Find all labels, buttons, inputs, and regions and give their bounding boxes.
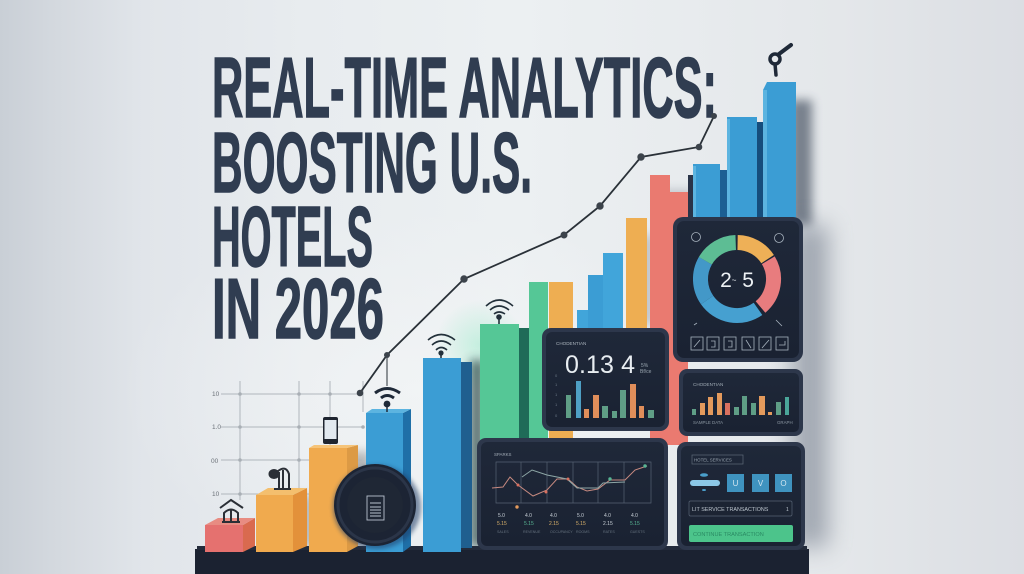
chart stat columns: OCCUPANCY xyxy=(550,530,573,534)
round speaker device xyxy=(333,464,421,549)
chart stat columns: ROOMS xyxy=(576,530,590,534)
control buttons: V xyxy=(758,479,764,488)
panel heading: CHODENTIAN xyxy=(556,341,586,346)
chart stat columns: 4.0 xyxy=(525,513,532,519)
chart stat columns: 5.15 xyxy=(497,521,507,527)
icon: bell hop cart xyxy=(270,469,291,489)
chart stat columns: 4.0 xyxy=(550,513,557,519)
panel: metric with bars xyxy=(542,328,669,431)
chart stat columns: REVENUE xyxy=(523,530,541,534)
icon: house xyxy=(220,500,243,522)
shelf xyxy=(195,546,809,574)
chart stat columns: 4.0 xyxy=(631,513,638,519)
bar: stepped red xyxy=(650,175,688,445)
icon: key on top of tallest bar xyxy=(770,45,791,75)
bars: stepped blue xyxy=(577,253,623,330)
panel heading: CHODENTIAN xyxy=(693,382,723,387)
icon: document xyxy=(367,496,384,520)
chart stat columns: RATES xyxy=(603,530,615,534)
axis ticks: 0 xyxy=(555,413,558,418)
icon: wifi on tall blue bar xyxy=(428,334,455,358)
status row: LIT SERVICE TRANSACTIONS xyxy=(692,507,769,513)
axis ticks: 1 xyxy=(555,392,558,397)
icon: wifi on green bar xyxy=(486,300,513,324)
donut value: 5 xyxy=(736,269,754,292)
bar: orange tall xyxy=(626,218,647,330)
title xyxy=(212,41,717,357)
cast shadows behind the charts xyxy=(295,100,828,547)
chart footer xyxy=(693,420,793,425)
chart stat columns: 5.15 xyxy=(630,521,640,527)
axis grid: 1.0 xyxy=(212,424,221,431)
chart stat columns: GUESTS xyxy=(630,530,645,534)
bar: green with wifi xyxy=(480,324,529,440)
bar: orange mid xyxy=(309,445,358,552)
icon: wifi on blue bar xyxy=(375,388,400,412)
donut value: 2 xyxy=(720,269,732,292)
trend line xyxy=(357,113,717,396)
chart stat columns: 5.0 xyxy=(498,513,505,519)
chart stat columns: 2.15 xyxy=(549,521,559,527)
panel: line chart xyxy=(477,438,668,550)
donut chart xyxy=(700,242,774,316)
chart stat columns: 2.15 xyxy=(603,521,613,527)
donut value: ~ xyxy=(732,276,737,285)
panel: small bar chart xyxy=(679,369,803,436)
bar: blue with wifi xyxy=(366,409,411,552)
slider xyxy=(690,473,720,491)
chart stat columns: 5.15 xyxy=(576,521,586,527)
bar: small red xyxy=(205,518,255,552)
status row xyxy=(689,501,792,516)
axis ticks: 1 xyxy=(555,402,558,407)
bars: green and orange pair xyxy=(529,282,573,438)
panel heading: SPARKS xyxy=(494,452,512,457)
title: IN 2026 xyxy=(212,262,384,357)
axis grid: 10 xyxy=(212,391,220,398)
chart footer: GRAPH xyxy=(777,420,793,425)
control buttons: U xyxy=(733,479,739,488)
title: HOTELS xyxy=(212,190,373,285)
chart stat columns: 4.0 xyxy=(604,513,611,519)
bar chart xyxy=(566,381,654,418)
chart stat columns xyxy=(497,513,645,534)
bar chart xyxy=(692,393,789,415)
chart stat columns: 5.0 xyxy=(577,513,584,519)
control buttons: O xyxy=(780,479,787,488)
axis grid: 10 xyxy=(212,491,220,498)
bar: tall blue xyxy=(423,358,472,552)
metric value: 0.13 4 xyxy=(565,351,635,379)
label box: HOTEL SERVICES xyxy=(694,458,732,462)
bar: orange low xyxy=(256,488,307,552)
panel: metric with bars: Bf/ce xyxy=(640,369,652,375)
metric unit: 5% xyxy=(641,363,649,369)
green button: CONTINUE TRANSACTION xyxy=(693,532,764,538)
line chart xyxy=(492,462,651,509)
axis grid: 00 xyxy=(211,458,219,465)
axis ticks xyxy=(555,373,558,418)
icon: smartphone xyxy=(323,417,338,444)
chart footer: SAMPLE DATA xyxy=(693,420,723,425)
title: BOOSTING U.S. xyxy=(212,116,532,211)
chart stat columns: 5.15 xyxy=(524,521,534,527)
bars: upper blue trio xyxy=(688,82,796,220)
chart stat columns: SALES xyxy=(497,530,509,534)
panel glyphs xyxy=(691,232,788,350)
axis ticks: 0 xyxy=(555,373,558,378)
control buttons xyxy=(727,474,792,492)
panel: donut gauge xyxy=(673,217,803,362)
panel: controls xyxy=(677,442,805,550)
axis grid xyxy=(211,381,365,500)
status row: 1 xyxy=(786,507,789,513)
axis ticks: 1 xyxy=(555,382,558,387)
